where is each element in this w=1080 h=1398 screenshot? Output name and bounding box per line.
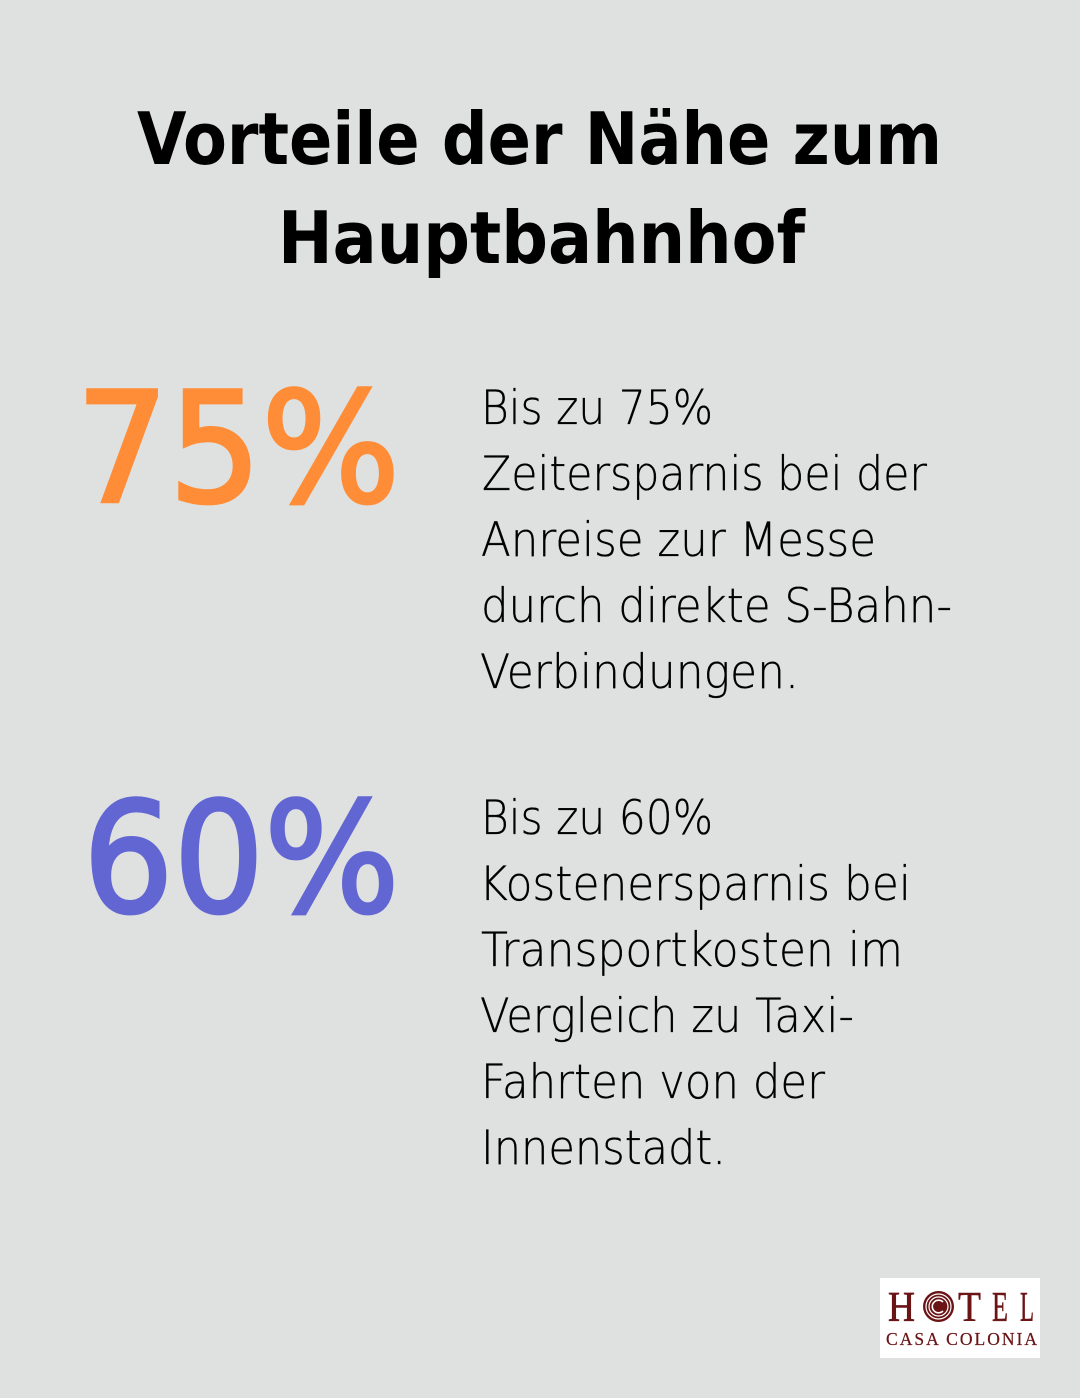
text block: 60% description: Vergleich zu Taxi- [480,989,854,1044]
text block: 60% description: Fahrten von der [481,1055,826,1110]
logo: Hotel Casa Colonia [880,1278,1040,1358]
logo: Hotel Casa Colonia: L [1020,1285,1034,1331]
text block: 60% description [479,791,911,1176]
number: 75%: 75% [76,360,400,538]
text block: 75% description: Bis zu 75% [481,381,713,436]
text block: 60% description: Transportkosten im [481,923,903,978]
title [137,97,942,280]
panel: 75% statistic [76,360,952,700]
text block: 75% description: durch direkte S-Bahn- [481,579,952,634]
logo: Hotel Casa Colonia: H [888,1285,915,1331]
panel: 60% statistic [83,770,911,1176]
title: Vorteile der Nähe zum [137,97,942,181]
number: 60%: 60% [83,770,400,948]
logo: Hotel Casa Colonia: E [992,1285,1008,1331]
text block: 75% description: Zeitersparnis bei der [482,447,928,502]
icon: spiral O [923,1291,954,1322]
text block: 60% description: Bis zu 60% [481,791,713,846]
text block: 75% description: Verbindungen. [480,645,799,700]
text block: 75% description [480,381,952,700]
text block: 60% description: Kostenersparnis bei [479,857,911,912]
text block: 75% description: Anreise zur Messe [481,513,876,568]
logo: Hotel Casa Colonia: T [958,1285,981,1331]
title: Hauptbahnhof [278,196,806,280]
text block: 60% description: Innenstadt. [481,1121,726,1176]
logo: Hotel Casa Colonia: CASA COLONIA [886,1329,1037,1349]
